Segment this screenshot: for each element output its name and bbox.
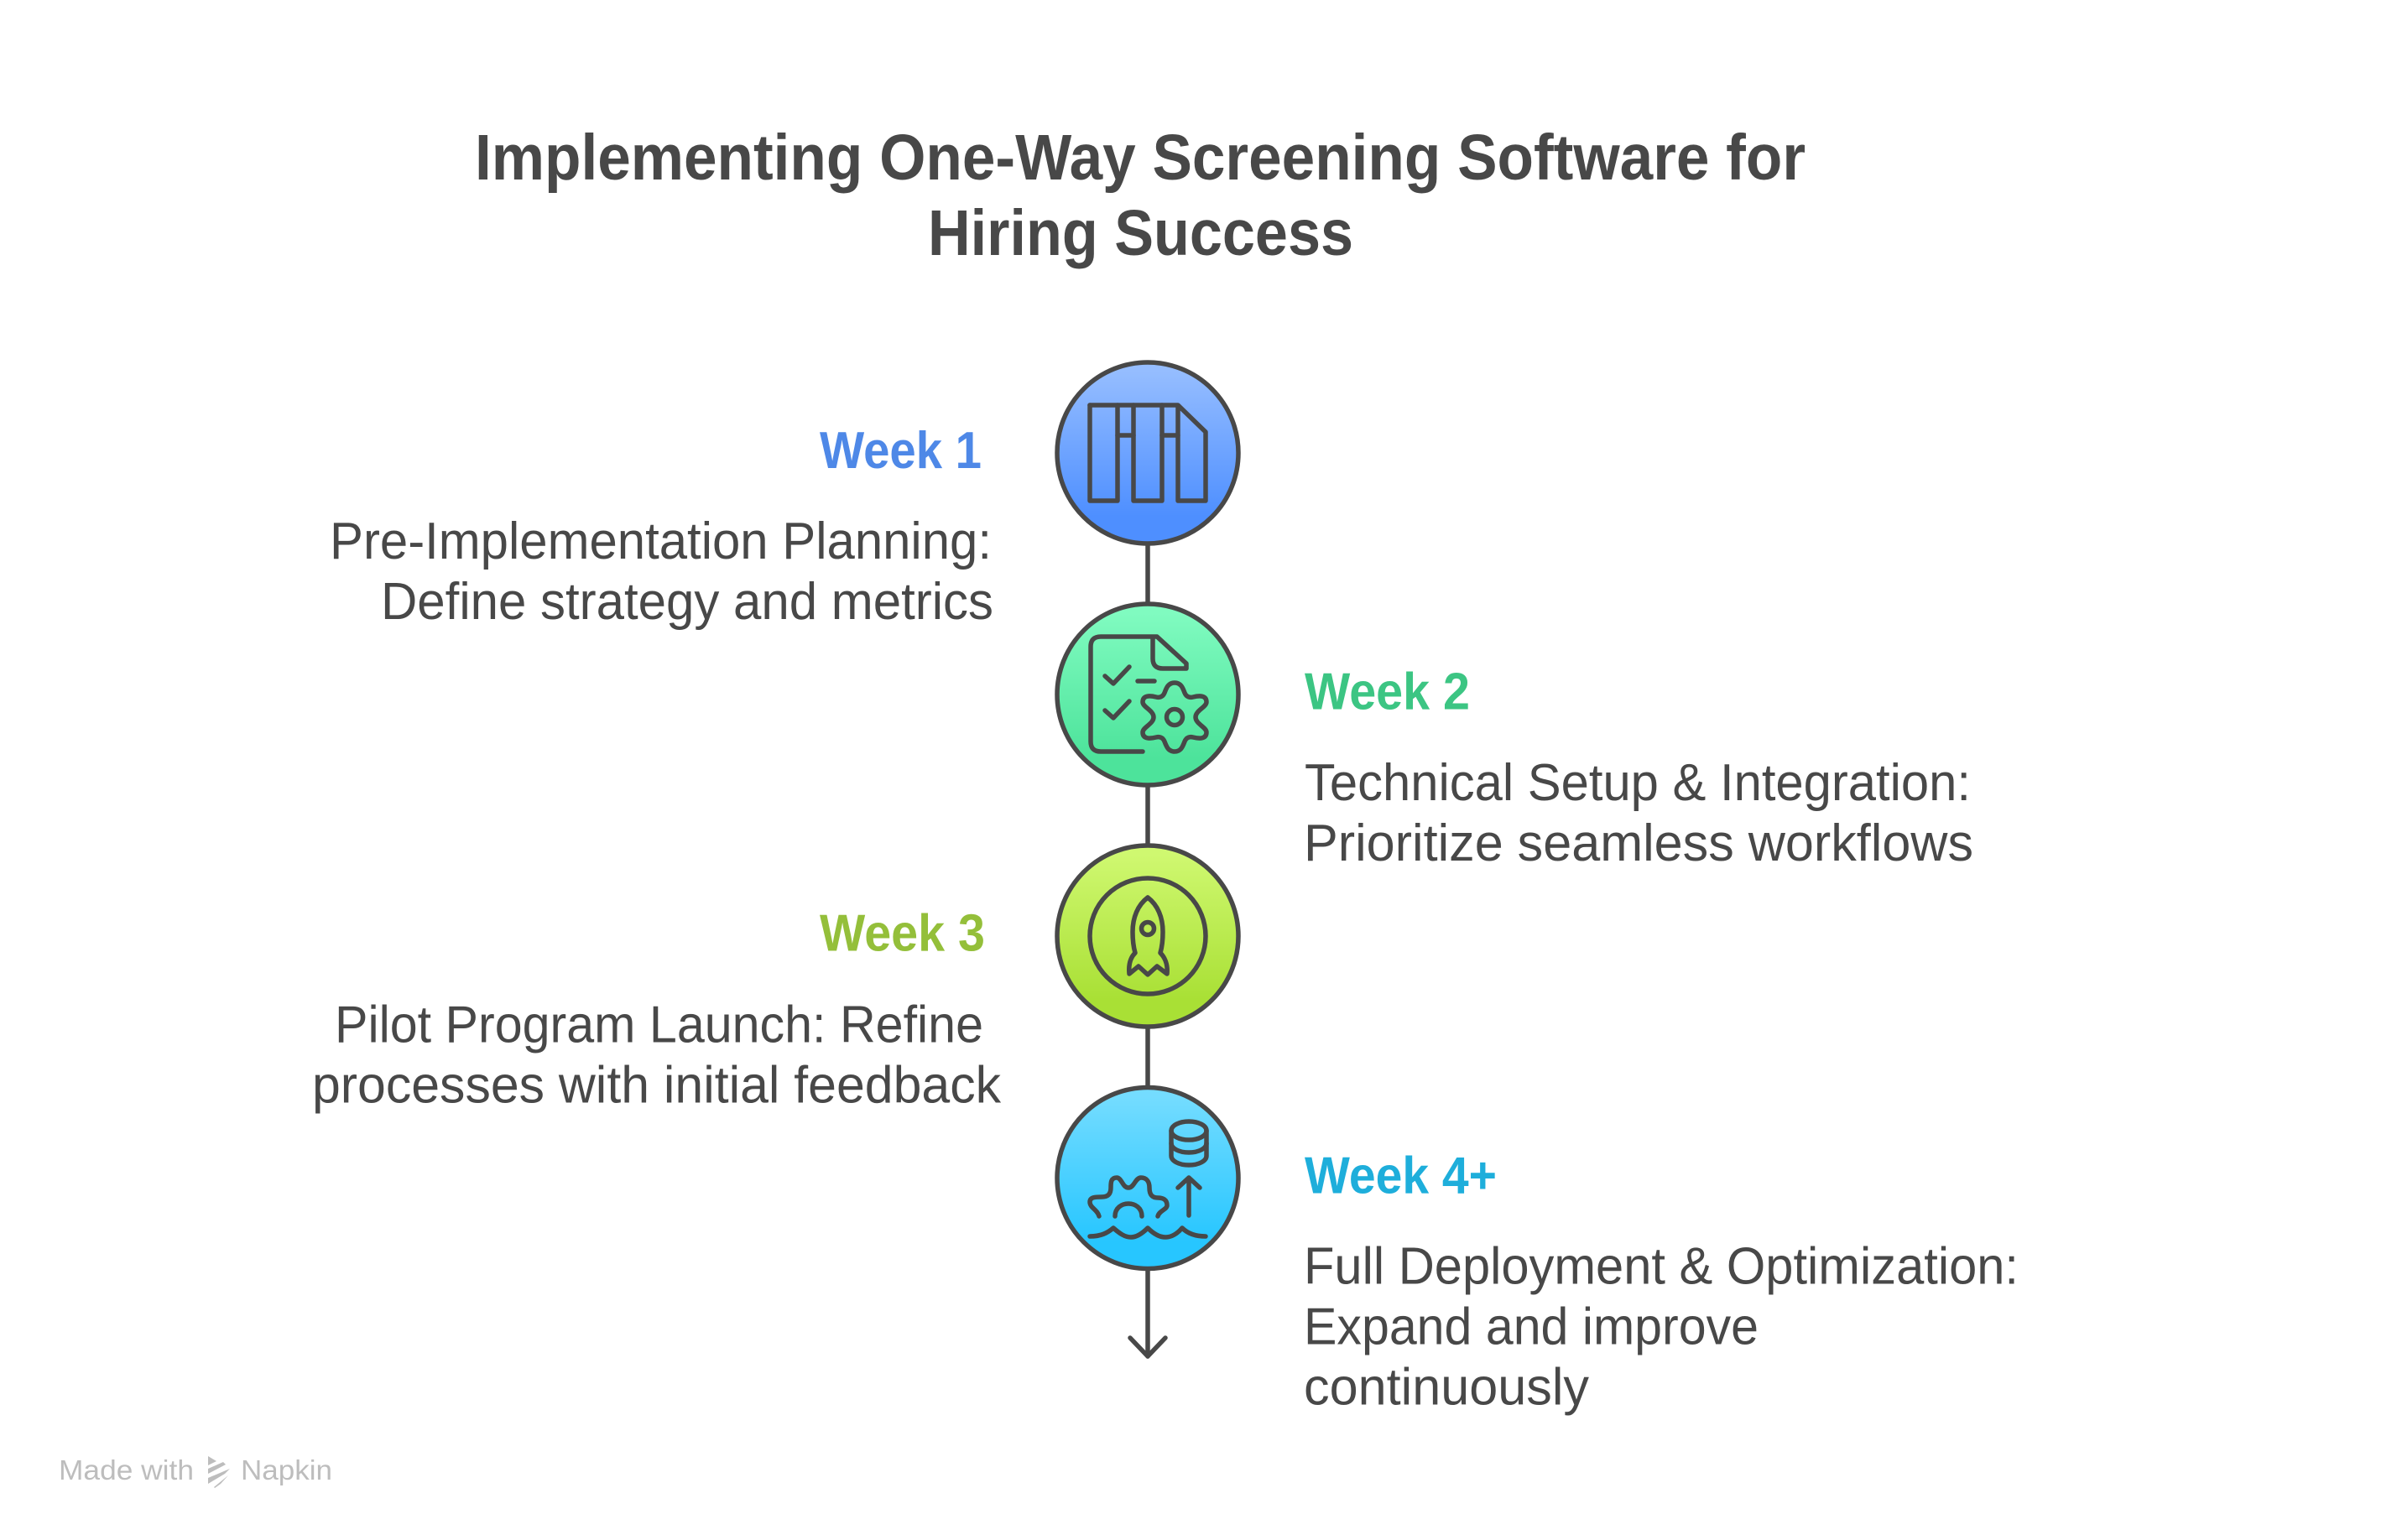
title: Hiring Success bbox=[928, 197, 1353, 269]
timeline line with arrow bbox=[1130, 453, 1165, 1356]
description: week 2: Prioritize seamless workflows bbox=[1304, 814, 1973, 872]
watermark: made with Napkin: Made with bbox=[59, 1454, 194, 1485]
description: week 2 bbox=[1304, 754, 1973, 872]
text block: week 3 bbox=[312, 904, 1002, 1114]
description: week 4+: continuously bbox=[1304, 1359, 1589, 1416]
title: Implementing One-Way Screening Software for bbox=[475, 122, 1806, 194]
step 1 node: week 1 bbox=[1057, 362, 1238, 544]
description: week 4+: Expand and improve bbox=[1304, 1298, 1759, 1355]
title bbox=[475, 122, 1806, 269]
circle: week 1 bbox=[1057, 362, 1238, 544]
heading: week 4+: Week 4+ bbox=[1305, 1147, 1497, 1204]
text block: week 4+ bbox=[1304, 1147, 2019, 1416]
watermark: made with Napkin bbox=[59, 1454, 332, 1488]
icon: checklist document with gear bbox=[1091, 637, 1206, 752]
circle: week 2 bbox=[1057, 604, 1238, 785]
watermark: made with Napkin: Napkin bbox=[241, 1454, 332, 1485]
circle: week 3 bbox=[1057, 845, 1238, 1027]
description: week 4+ bbox=[1304, 1238, 2019, 1416]
text block: week 1 bbox=[330, 422, 993, 631]
icon: gear, waves, arrow and database bbox=[1090, 1121, 1206, 1237]
heading: week 2: Week 2 bbox=[1305, 663, 1470, 721]
step 3 node: week 3 bbox=[1057, 845, 1238, 1027]
heading: week 1: Week 1 bbox=[820, 422, 982, 480]
circle: week 4+ bbox=[1057, 1087, 1238, 1268]
description: week 3 bbox=[312, 996, 1002, 1114]
description: week 3: Pilot Program Launch: Refine bbox=[335, 996, 983, 1054]
description: week 1: Define strategy and metrics bbox=[381, 573, 993, 631]
description: week 1: Pre-Implementation Planning: bbox=[330, 512, 992, 570]
icon: Napkin logo bbox=[208, 1456, 230, 1488]
description: week 1 bbox=[330, 512, 993, 631]
description: week 4+: Full Deployment & Optimization: bbox=[1304, 1238, 2019, 1295]
step 2 node: week 2 bbox=[1057, 604, 1238, 785]
step 4 node: week 4+ bbox=[1057, 1087, 1238, 1268]
icon: books and document bbox=[1090, 405, 1206, 501]
heading: week 3: Week 3 bbox=[820, 904, 985, 963]
description: week 2: Technical Setup & Integration: bbox=[1305, 754, 1971, 812]
icon: rocket in ring bbox=[1090, 878, 1206, 994]
description: week 3: processes with initial feedback bbox=[312, 1057, 1002, 1114]
text block: week 2 bbox=[1304, 663, 1973, 872]
